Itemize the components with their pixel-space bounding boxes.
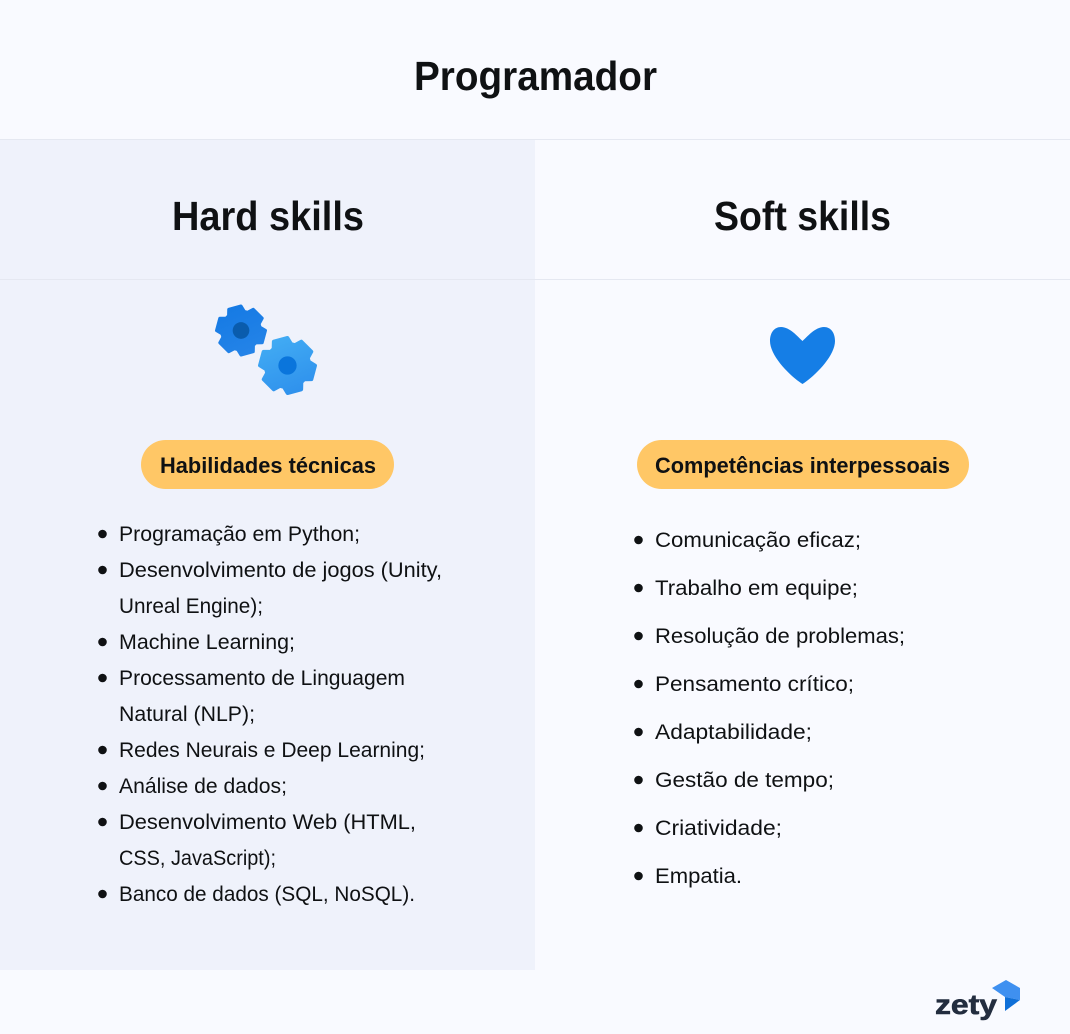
list: hard skills: Análise de dados; [119,774,287,798]
list: hard skills: Unreal Engine); [119,594,263,618]
logo: zety [935,980,1020,1020]
heading: hard skills: Hard skills [172,193,364,239]
list: hard skills: Programação em Python; [119,522,360,546]
badge: habilidades tecnicas [141,440,394,489]
list: hard skills: Processamento de Linguagem [119,666,405,690]
list: soft skills: Gestão de tempo; [655,768,834,792]
heading: soft skills: Soft skills [714,193,891,239]
list: hard skills: Banco de dados (SQL, NoSQL). [119,882,415,906]
list: hard skills: Machine Learning; [119,630,295,654]
list: soft skills: Comunicação eficaz; [655,528,861,552]
badge: competencias interpessoais [637,440,969,489]
list: soft skills [634,528,905,888]
panel: hard skills [0,140,535,970]
list: hard skills [98,522,442,906]
icon: heart [770,327,835,384]
list: soft skills: Empatia. [655,864,742,888]
list: hard skills: Redes Neurais e Deep Learning; [119,738,425,762]
title: Programador [414,53,657,99]
logo: zety: zety [935,989,997,1020]
badge: competencias interpessoais: Competências interpessoais [655,453,950,478]
icon: gears [217,306,315,393]
list: hard skills: Desenvolvimento Web (HTML, [119,810,416,834]
list: soft skills: Trabalho em equipe; [655,576,858,600]
list: hard skills: CSS, JavaScript); [119,846,276,870]
list: hard skills: Natural (NLP); [119,702,255,726]
list: soft skills: Resolução de problemas; [655,624,905,648]
list: soft skills: Adaptabilidade; [655,720,812,744]
list: hard skills: Desenvolvimento de jogos (Unity, [119,558,442,582]
list: soft skills: Pensamento crítico; [655,672,854,696]
badge: habilidades tecnicas: Habilidades técnicas [160,453,376,478]
list: soft skills: Criatividade; [655,816,782,840]
